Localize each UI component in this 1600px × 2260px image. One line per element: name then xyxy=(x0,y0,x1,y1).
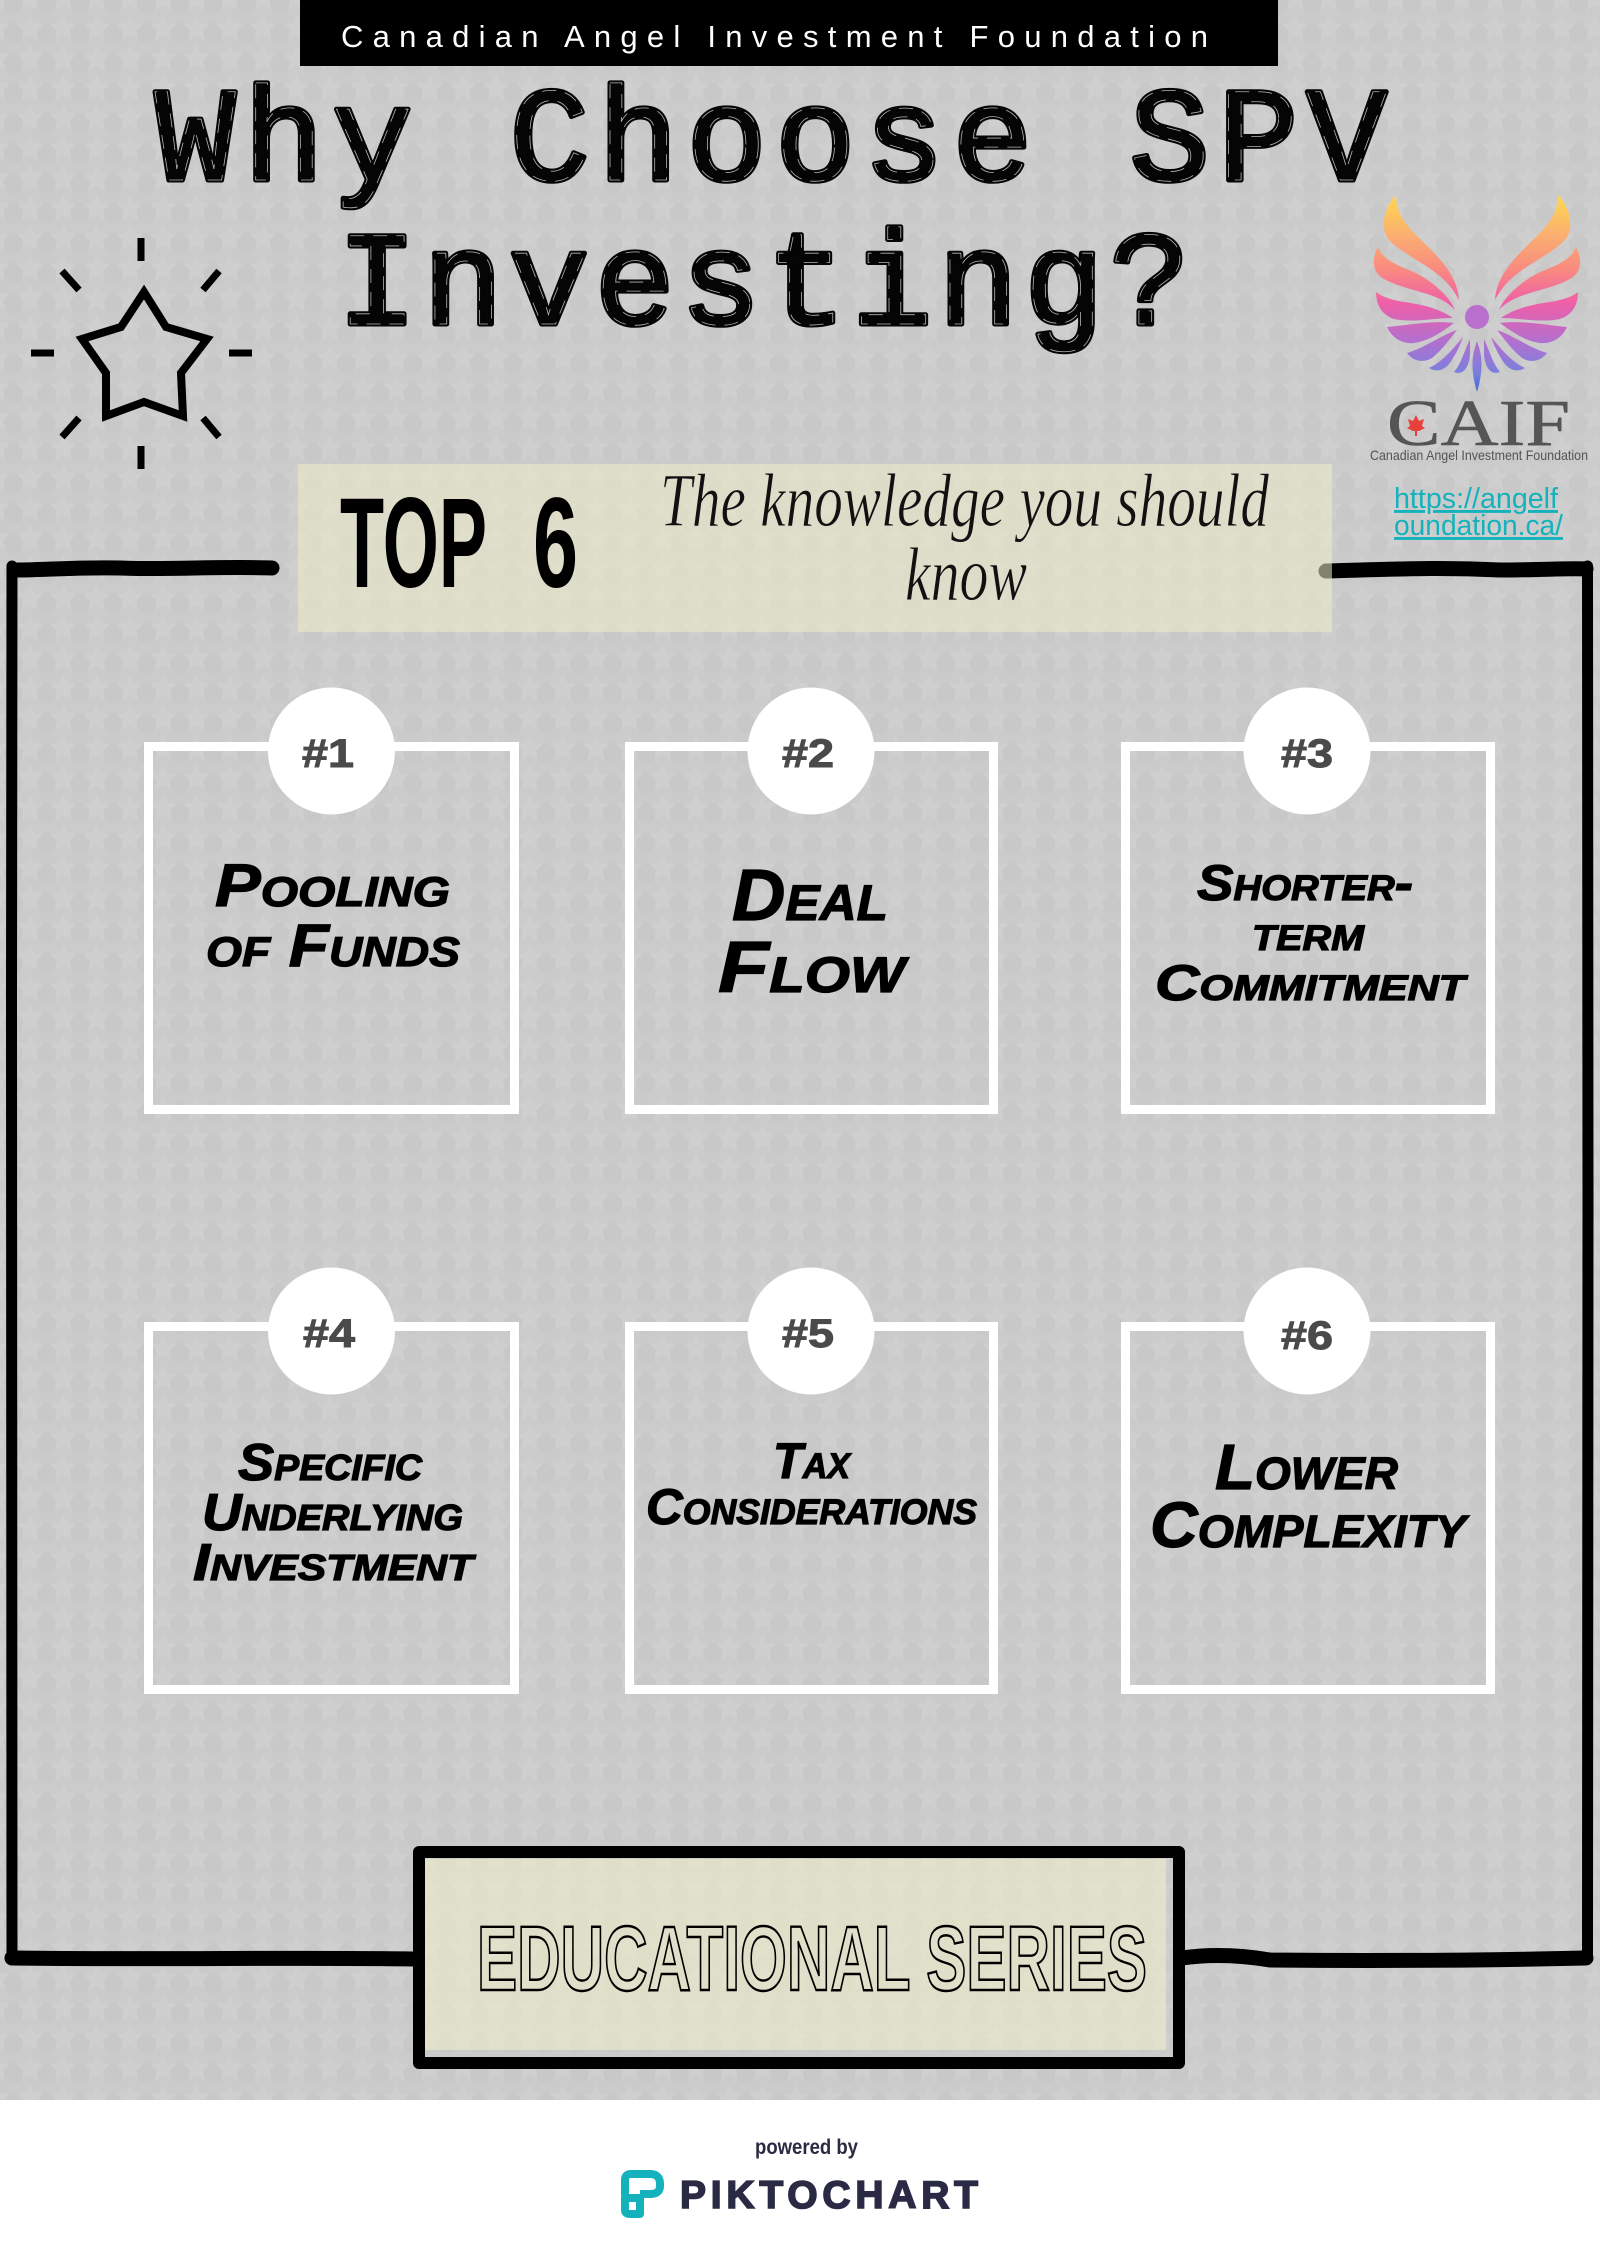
title: Why Choose SPV xyxy=(155,69,1387,221)
panel: card 3: term xyxy=(1252,905,1365,961)
panel: card 4: #4 xyxy=(303,1312,356,1356)
footer background xyxy=(0,2100,1600,2260)
panel: card 2 xyxy=(630,688,994,1110)
title: Why Choose SPV xyxy=(155,69,1387,221)
panel: card 1: of Funds xyxy=(206,912,460,979)
panel: card 6: Complexity xyxy=(1150,1489,1470,1561)
panel: card 6: Lower xyxy=(1215,1431,1399,1503)
top 6 label: TOP xyxy=(340,472,487,615)
website link: oundation.ca/ xyxy=(1394,510,1564,542)
panel: educational series xyxy=(419,1852,1179,2063)
subtitle xyxy=(660,459,1270,617)
subtitle: know xyxy=(905,533,1027,617)
panel: educational series: EDUCATIONAL SERIES xyxy=(477,1908,1147,2010)
title xyxy=(155,69,1387,365)
logo: CAIF wings: CAIF xyxy=(1387,387,1570,460)
panel: card 5: Tax xyxy=(773,1433,853,1489)
outer frame line xyxy=(12,566,1588,1960)
panel: card 6 xyxy=(1126,1268,1490,1690)
panel: card 5 xyxy=(630,1268,994,1690)
footer: powered by: powered by xyxy=(755,2136,858,2159)
subtitle: The knowledge you should xyxy=(660,459,1270,543)
panel: top 6 banner xyxy=(298,459,1332,632)
panel: card 4: Specific xyxy=(238,1434,423,1492)
top 6 label: 6 xyxy=(533,472,578,615)
panel: card 2: Deal xyxy=(732,856,888,936)
website link xyxy=(1394,483,1564,542)
footer: piktochart logo icon xyxy=(625,2174,660,2214)
panel: card 1: Pooling xyxy=(215,852,450,919)
panel: card 5: #5 xyxy=(782,1312,834,1356)
top banner: Canadian Angel Investment Foundation xyxy=(341,19,1208,54)
logo: CAIF wings xyxy=(1370,195,1588,463)
title: Investing? xyxy=(337,213,1190,365)
panel: card 2: #2 xyxy=(782,732,834,776)
panel: card 3: Shorter- xyxy=(1197,855,1413,911)
panel: card 4: Underlying xyxy=(202,1484,463,1542)
panel: card 6: #6 xyxy=(1281,1314,1333,1358)
panel: card 2: Flow xyxy=(718,928,909,1008)
panel: card 3: #3 xyxy=(1281,732,1333,776)
panel: card 1 xyxy=(148,688,514,1110)
footer: piktochart wordmark: PIKTOCHART xyxy=(680,2174,978,2217)
panel: card 5: Considerations xyxy=(646,1479,977,1535)
icon: star with rays xyxy=(31,238,252,469)
top banner xyxy=(300,0,1278,66)
panel: card 1: #1 xyxy=(302,732,354,776)
title: Investing? xyxy=(337,213,1190,365)
panel: card 4 xyxy=(148,1268,514,1690)
panel: card 3 xyxy=(1126,688,1490,1110)
panel: card 4: Investment xyxy=(193,1534,477,1592)
website link: https://angelf xyxy=(1394,483,1559,515)
panel: card 3: Commitment xyxy=(1155,955,1468,1011)
